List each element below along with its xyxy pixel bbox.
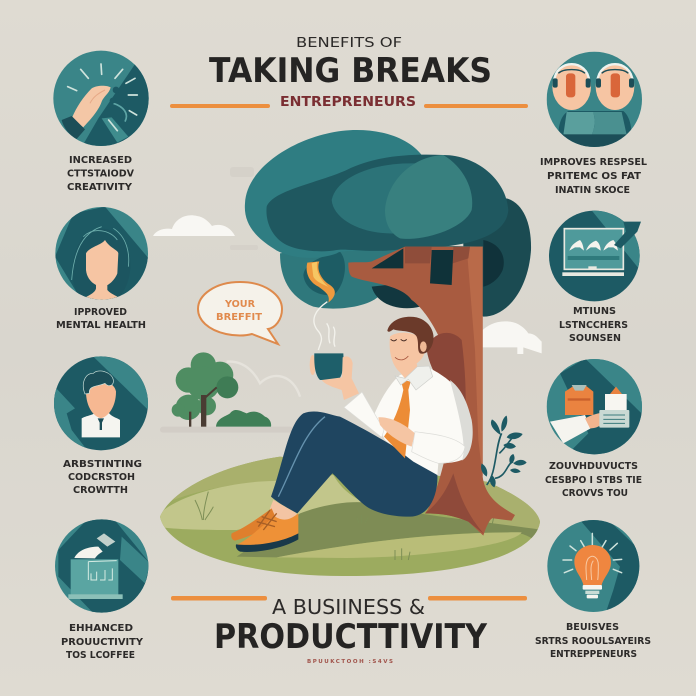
label: entrepreneurs [535,622,651,660]
footer block [171,595,527,665]
label: improved mental health: IPPROVED [74,307,127,318]
speech bubble: BREFFIT [216,312,262,323]
man: hand on chest [378,417,415,447]
icon: businessman bust [50,355,152,452]
icon: woman portrait [53,205,150,303]
label: growth: CODCRSTOH [68,472,135,483]
label: entrepreneurs: BEUISVES [566,622,619,633]
man: forearm and hand [322,356,359,400]
panel: products [545,358,645,499]
label: enhanced productivity: TOS LCOFFEE [66,650,135,661]
man: hair [387,317,434,354]
label: improved mental health [56,307,146,331]
title block [170,35,528,110]
man: tie [384,379,411,458]
man: sleeve [344,392,384,437]
illustration: tree canopy [245,130,531,317]
speech bubble [198,282,282,344]
label: increased creativity: CREATIVITY [67,182,132,193]
heading: taking breaks: TAKING BREAKS [209,51,492,91]
label: improves respsel: IMPROVES RESPSEL [540,157,647,168]
label: products: CROVVS TOU [562,488,628,499]
man: coffee cup [314,353,343,380]
label: laptop insights: MTIUNS [573,306,616,317]
label: increased creativity: CTTSTAIODV [67,168,135,180]
panel: growth [54,356,148,493]
label: improves respsel [540,157,647,196]
label: increased creativity: INCREASED [69,155,132,166]
man: shoe sole [236,533,298,552]
icon: laptop with chart [53,518,152,617]
right orange rule [424,104,528,108]
label: improved mental health: MENTAL HEALTH [56,320,146,331]
panel: improved mental health [53,205,150,331]
icon: two faces with headphones [547,52,643,149]
label: entrepreneurs: ENTREPPENEURS [550,649,637,660]
left orange rule [170,104,270,108]
cloud: left [153,215,235,236]
label: growth: ARBSTINTING [63,459,142,470]
heading: benefits of: BENEFITS OF [296,35,402,51]
label: laptop insights [559,306,628,344]
man: shoe laces [257,510,277,530]
icon: vest, hand and tablet [547,358,645,455]
label: products: ZOUVHDUVUCTS [549,461,638,472]
panel: enhanced productivity [53,518,152,661]
man: ankle [270,500,297,520]
icon: hand and spark [53,50,149,146]
illustration: background small tree and bush [160,352,300,433]
label: growth: CROWTTH [73,485,128,496]
label: increased creativity [67,155,135,193]
label: improves respsel: PRITEMC OS FAT [547,171,642,182]
label: improves respsel: INATIN SKOCE [555,185,630,196]
man: trousers [271,412,437,517]
man: neck and face [390,333,425,378]
panel: increased creativity [53,50,149,190]
right orange rule [428,596,527,600]
icon: laptop with arrow [549,210,641,302]
panel: laptop insights [547,208,643,344]
illustration: grass [157,450,543,580]
panel: improves respsel [540,52,647,196]
background streaks [230,167,258,250]
man: shirt [373,368,472,475]
man: far shoe [231,508,277,541]
illustration: flame and steam [307,261,335,350]
subheading: entrepreneurs: ENTREPRENEURS [280,94,416,110]
heading: a business: A BUSIINESS & [272,595,425,619]
label: products [545,461,642,499]
man: collar [395,366,433,390]
small caption: BPUUKCTOOH :S4VS [307,659,393,665]
label: enhanced productivity: PROUUCTIVITY [61,637,143,648]
man: near shoe [237,513,298,548]
label: products: CESBPO I STBS TIE [545,475,642,486]
icon: light bulb [547,520,640,612]
man: cuff [412,432,465,463]
label: growth [63,459,142,496]
label: enhanced productivity [61,623,143,661]
illustration: small sprout [481,416,527,487]
label: laptop insights: SOUNSEN [569,333,621,344]
cloud: right [483,321,542,354]
speech bubble: YOUR [224,299,255,310]
illustration: tree trunk [348,247,515,536]
panel: entrepreneurs [535,518,651,660]
man: ear [420,341,427,352]
illustration: man drinking coffee [231,317,473,552]
man: left fingers [310,355,316,375]
left orange rule [171,596,267,600]
heading: productivity: PRODUCTTIVITY [214,617,488,656]
label: enhanced productivity: EHHANCED [69,623,133,634]
label: entrepreneurs: SRTRS ROOULSAYEIRS [535,636,651,647]
label: laptop insights: LSTNCCHERS [559,320,628,331]
